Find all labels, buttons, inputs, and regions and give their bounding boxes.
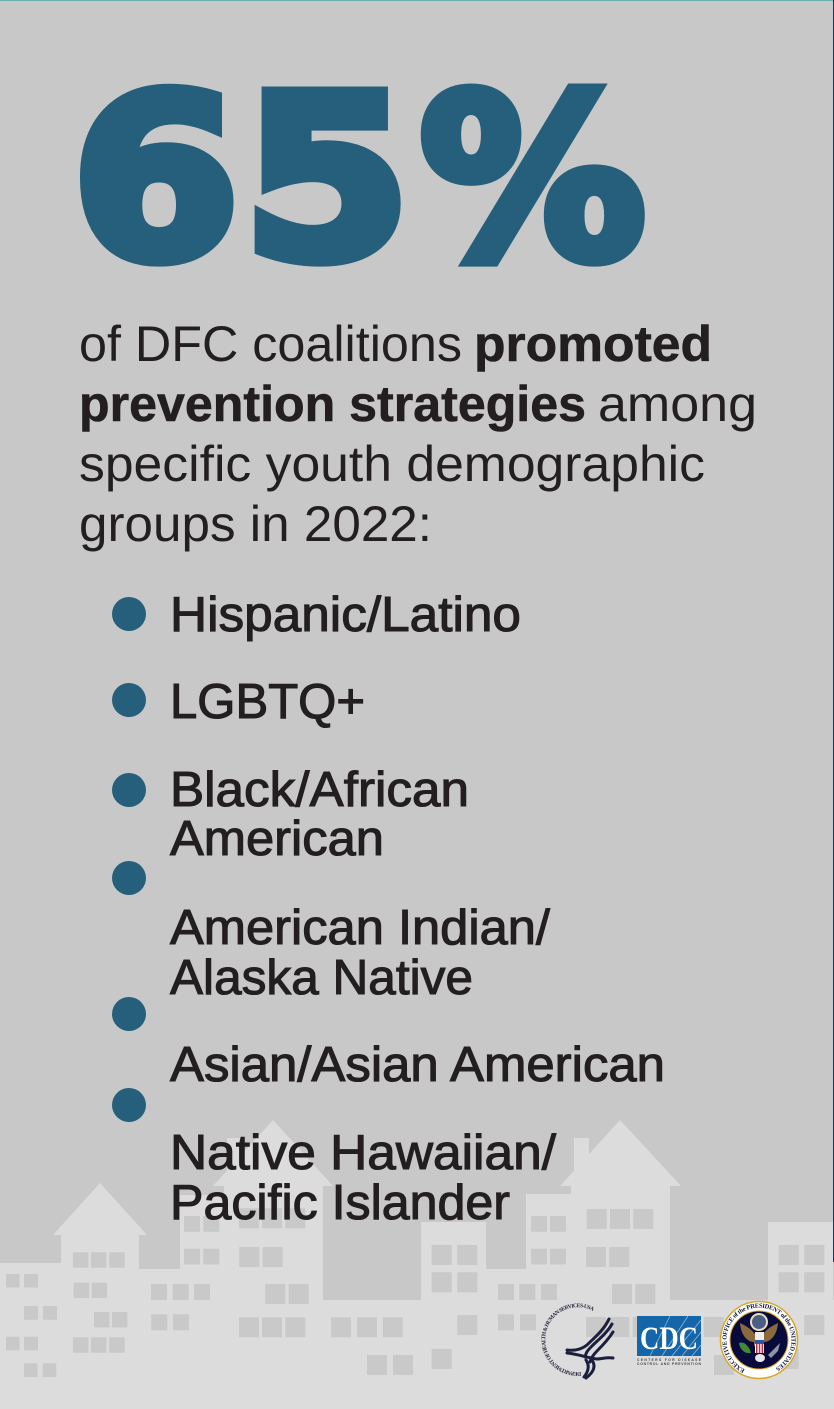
bullet markers	[112, 597, 146, 1122]
intro paragraph: specific youth demographic	[79, 436, 705, 492]
headline statistic: 65%	[72, 48, 645, 311]
demographic group list: LGBTQ+	[170, 675, 365, 729]
logo: CDC: CDC	[640, 1321, 698, 1357]
logo: Executive Office of the President seal: EXECUTIVE OFFICE of the PRESIDENT of the UNITED STATES	[722, 1303, 796, 1374]
logo: CDC: CENTERS FOR DISEASE	[637, 1358, 702, 1362]
intro paragraph: promoted	[474, 316, 712, 372]
intro paragraph: prevention strategies	[79, 376, 586, 432]
demographic group list: Asian/Asian American	[170, 1038, 665, 1092]
headline statistic: 65%: 6	[72, 48, 240, 310]
skyline illustration	[0, 1120, 834, 1409]
intro paragraph: groups in 2022:	[79, 496, 432, 552]
intro paragraph	[79, 316, 757, 552]
demographic group list	[170, 588, 665, 1230]
headline statistic: 65%: %	[420, 49, 645, 311]
demographic group list: Black/African	[170, 763, 469, 817]
logo: CDC: CONTROL AND PREVENTION	[637, 1362, 702, 1366]
demographic group list: Native Hawaiian/	[170, 1126, 556, 1180]
demographic group list: American Indian/	[170, 901, 550, 955]
demographic group list: Hispanic/Latino	[170, 588, 521, 642]
headline statistic: 65%: 5	[243, 48, 411, 310]
logo: CDC	[637, 1316, 702, 1366]
demographic group list: Pacific Islander	[170, 1176, 510, 1230]
demographic group list: Alaska Native	[170, 951, 473, 1005]
logo: HHS seal: DEPARTMENT OF HEALTH & HUMAN SERVICES-USA	[542, 1304, 594, 1376]
intro paragraph: of DFC coalitions	[79, 316, 462, 372]
intro paragraph: among	[598, 376, 757, 432]
demographic group list: American	[170, 812, 384, 866]
logo: HHS seal	[542, 1304, 615, 1380]
